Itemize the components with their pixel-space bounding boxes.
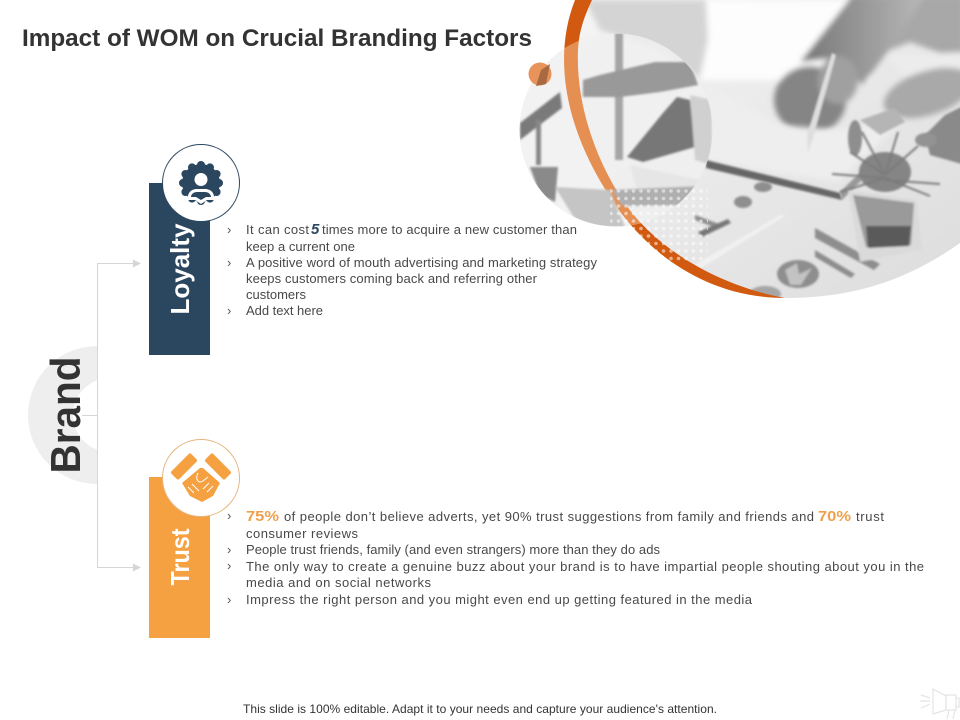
clipboard edge [706,160,842,200]
brand background crescent [28,346,97,484]
text block: loyalty bullets: › [227,303,231,318]
label: Trust: Trust [165,528,195,586]
crescent tint [564,41,641,226]
charts on desk [695,182,880,302]
text block: trust bullets: › [227,508,231,523]
icon: orange dot on pole [528,62,552,86]
text block: trust bullets: People trust friends, family (and even strangers) more than they do ads [246,542,660,557]
halftone dots [610,186,708,264]
text block: loyalty bullets: It can cost [246,222,309,237]
pen [807,53,836,153]
text block: trust bullets: The only way to create a genuine buzz about your brand is to have impartial people shouting about you in the [246,559,924,574]
text block: loyalty bullets: Add text here [246,303,323,318]
plant [832,120,940,262]
label: Loyalty: Loyalty [165,223,195,314]
text block: loyalty bullets [227,221,598,318]
arrow: to Trust [133,564,141,572]
text block: trust bullets: media and on social networks [246,575,432,590]
title: Impact of WOM on Crucial Branding Factors [22,25,532,52]
text block: trust bullets: of people don’t believe adverts, yet 90% trust suggestions from family and friends and [284,509,814,524]
text block: trust bullets: › [227,592,231,607]
text block: loyalty bullets: › [227,222,231,237]
text block: loyalty bullets: A positive word of mouth advertising and marketing strategy [246,255,598,270]
text block: loyalty bullets: › [227,255,231,270]
paper sheet [781,122,880,176]
panel: Trust bar [149,477,210,638]
text block: trust bullets: trust [856,509,884,524]
heading: Brand: Brand [42,356,89,474]
text block: trust bullets: consumer reviews [246,526,358,541]
text block: trust bullets [227,508,924,607]
text block: trust bullets: › [227,558,231,573]
icon: megaphone [920,689,959,719]
text block: trust bullets: Impress the right person and you might even end up getting featured in the media [246,592,753,607]
text block: loyalty bullets: 5 [311,221,320,238]
arrow: to Loyalty [133,260,141,268]
connector lines [82,264,140,568]
text block: loyalty bullets: times more to acquire a new customer than [322,222,577,237]
photo: small circular meeting image [520,34,712,226]
panel: Loyalty bar [149,183,210,355]
icon: handshake [162,440,240,516]
text block: trust bullets: › [227,542,231,557]
text block: trust bullets: 70% [818,508,851,525]
text block: loyalty bullets: customers [246,287,306,302]
icon: loyalty badge [162,144,240,222]
orange crescent arc [564,0,785,298]
text block: loyalty bullets: keeps customers coming back and referring other [246,271,538,286]
text block: loyalty bullets: keep a current one [246,239,355,254]
calculator [925,105,960,165]
text block: trust bullets: 75% [246,508,279,525]
photo: large office desk image [550,0,960,302]
footer note: This slide is 100% editable. Adapt it to your needs and capture your audience's attention. [243,702,717,716]
